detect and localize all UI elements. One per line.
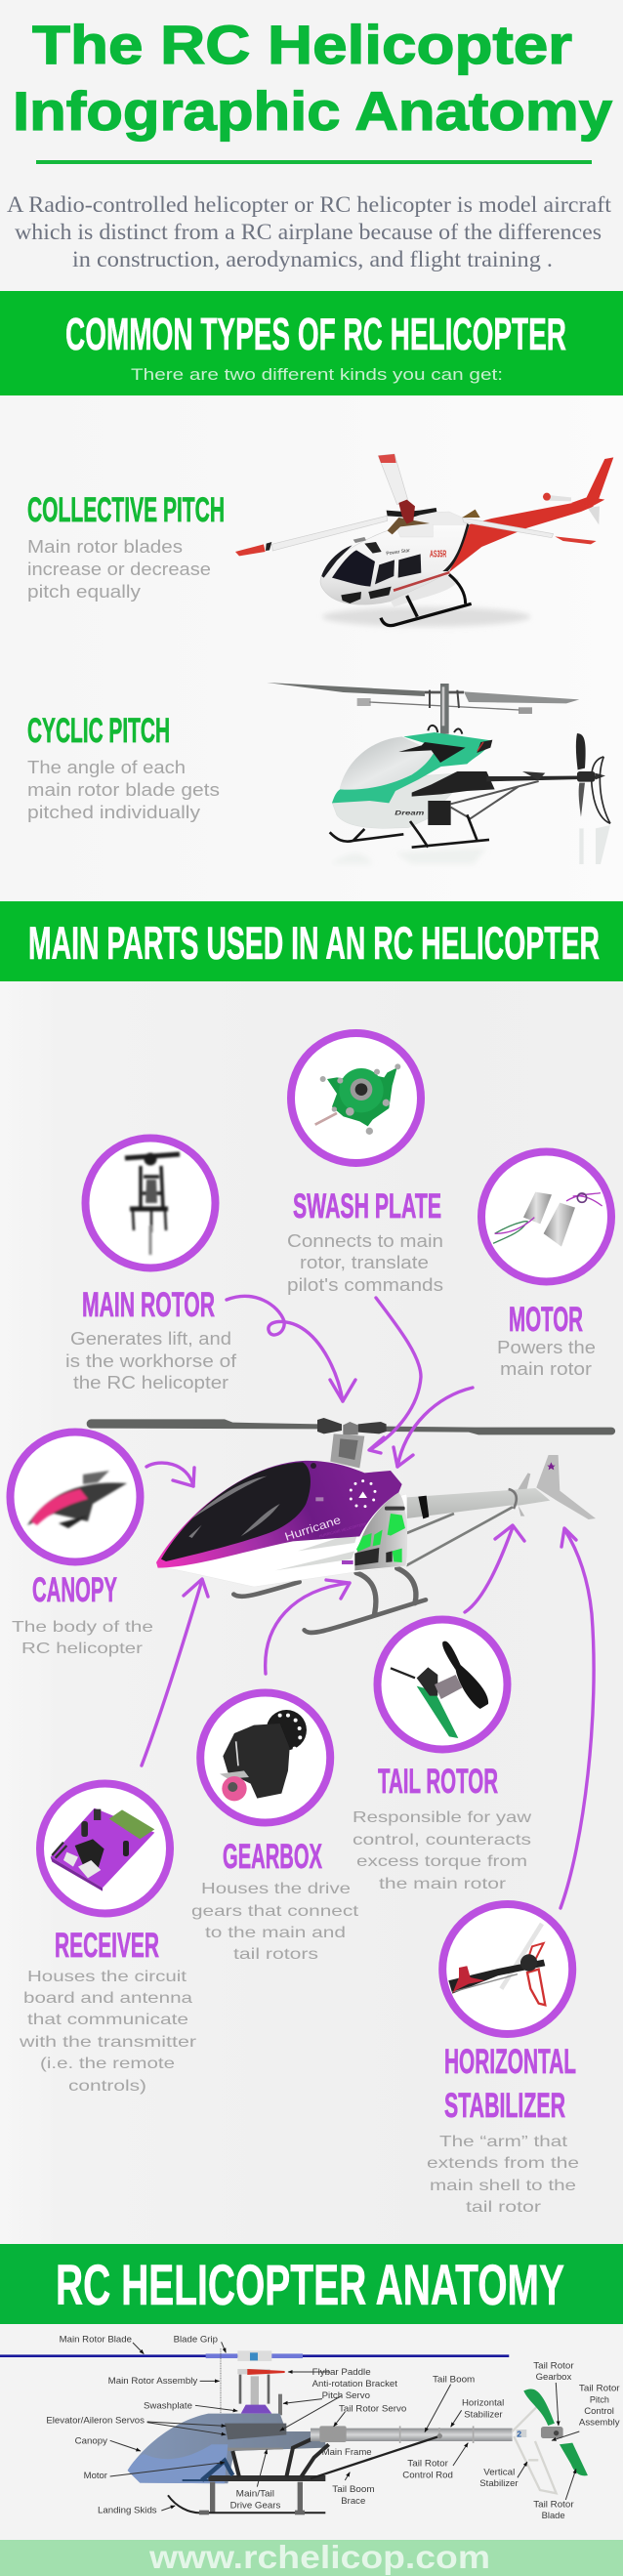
icon: swash plate	[291, 1033, 421, 1163]
text: receiver: board and antenna	[23, 1990, 192, 2007]
text: main rotor: the RC helicopter	[73, 1373, 228, 1392]
arrow: canopy	[146, 1463, 194, 1486]
text: tail rotor: Responsible for yaw	[353, 1809, 532, 1826]
intro paragraph	[7, 192, 612, 271]
text: horizontal stabilizer	[427, 2043, 579, 2216]
part: swash plate	[287, 1033, 443, 1295]
diagram labels: Horizontal	[462, 2397, 504, 2407]
arrow: motor	[394, 1388, 473, 1467]
icon: receiver circuit board	[40, 1783, 170, 1914]
diagram labels: Assembly	[579, 2418, 620, 2428]
text: receiver: controls)	[68, 2078, 146, 2095]
text: tail rotor: control, counteracts	[353, 1832, 531, 1849]
main rotor blade line	[0, 2352, 509, 2360]
text: gearbox: Houses the drive	[201, 1881, 351, 1897]
diagram labels: Main/Tail	[236, 2489, 274, 2499]
text: horizontal stabilizer: extends from the	[427, 2155, 579, 2172]
photo: red white collective pitch helicopter	[235, 454, 613, 627]
anatomy diagram	[0, 2334, 620, 2520]
footer website bar	[0, 2539, 623, 2576]
diagram labels: Gearbox	[536, 2372, 572, 2382]
text: receiver: that communicate	[27, 2012, 188, 2028]
diagram labels: Main Rotor Assembly	[108, 2376, 198, 2386]
title: The RC Helicopter	[32, 14, 572, 75]
text: swash plate: pilot's commands	[287, 1275, 443, 1295]
text: receiver: (i.e. the remote	[40, 2056, 175, 2072]
text: motor	[497, 1301, 596, 1379]
footer website bar: www.rchelicop.com	[148, 2539, 490, 2575]
text block: cyclic pitch: CYCLIC PITCH	[27, 712, 170, 750]
part: receiver	[19, 1783, 197, 2095]
text: swash plate: Connects to main	[287, 1231, 443, 1251]
text: canopy: CANOPY	[32, 1571, 117, 1609]
Hurricane wordmark	[283, 1513, 367, 1544]
diagram labels: Flybar Paddle	[312, 2367, 371, 2377]
banner: common types: There are two different kinds you can get:	[131, 365, 503, 384]
intro paragraph: in construction, aerodynamics, and flight training .	[72, 247, 553, 271]
tail boom	[311, 2389, 588, 2493]
diagram labels: Tail Rotor	[579, 2384, 620, 2393]
diagram labels: Tail Rotor	[533, 2499, 574, 2509]
icon: gearbox	[200, 1693, 330, 1822]
text: gearbox	[191, 1838, 359, 1963]
diagram labels: Canopy	[75, 2435, 107, 2445]
diagram labels: Brace	[341, 2496, 365, 2506]
text block: cyclic pitch	[27, 712, 220, 822]
text: motor: Powers the	[497, 1338, 596, 1357]
canopy purple shell	[156, 1461, 402, 1568]
part: gearbox	[191, 1693, 359, 1963]
text: main rotor: MAIN ROTOR	[82, 1286, 215, 1324]
diagram labels: Pitch	[590, 2394, 609, 2404]
text: gearbox: tail rotors	[233, 1946, 318, 1963]
diagram labels: Blade	[542, 2511, 565, 2520]
diagram labels: Pitch Servo	[322, 2390, 370, 2400]
photo: green cyclic pitch helicopter: Dream	[395, 810, 425, 816]
text: gearbox: gears that connect	[191, 1903, 359, 1920]
diagram labels: Stabilizer	[464, 2409, 503, 2419]
arrow: horizontal stabilizer	[561, 1528, 594, 1908]
text: tail rotor: TAIL ROTOR	[378, 1763, 498, 1801]
icon: motor	[481, 1152, 611, 1281]
text: main rotor: Generates lift, and	[70, 1329, 231, 1349]
rotor head assembly	[221, 2348, 285, 2418]
diagram labels	[46, 2334, 620, 2520]
skids	[233, 1568, 426, 1633]
part: horizontal stabilizer	[427, 1904, 579, 2216]
diagram labels: Main Frame	[322, 2447, 372, 2457]
text: receiver: RECEIVER	[55, 1927, 159, 1965]
text: canopy: The body of the	[12, 1619, 153, 1636]
tail boom: 2	[517, 2429, 521, 2438]
diagram labels: Drive Gears	[230, 2500, 281, 2510]
text block: cyclic pitch: pitched individually	[27, 803, 200, 822]
icon: main rotor head	[86, 1139, 215, 1267]
text: receiver: Houses the circuit	[27, 1969, 187, 1985]
text: tail rotor	[353, 1763, 532, 1892]
leader lines	[110, 2342, 579, 2511]
Hurricane wordmark: Hurricane	[283, 1513, 343, 1544]
text block: collective pitch: pitch equally	[27, 582, 141, 602]
side panel	[342, 1492, 407, 1570]
text: horizontal stabilizer: main shell to the	[430, 2178, 576, 2194]
diagram labels: Tail Rotor Servo	[339, 2403, 406, 2413]
diagram labels: Landing Skids	[98, 2505, 157, 2514]
star emblem	[350, 1479, 376, 1508]
tail boom and fin	[406, 1455, 596, 1565]
text: tail rotor: the main rotor	[379, 1876, 507, 1892]
part: motor	[481, 1152, 611, 1379]
intro paragraph: which is distinct from a RC airplane because of the differences	[15, 220, 602, 244]
text: swash plate: SWASH PLATE	[293, 1187, 441, 1226]
text: canopy: RC helicopter	[21, 1641, 144, 1657]
part: tail rotor	[353, 1619, 532, 1892]
text: receiver: with the transmitter	[19, 2034, 197, 2051]
text: canopy	[12, 1571, 153, 1657]
arrow: gearbox	[266, 1580, 350, 1674]
part: main rotor	[65, 1139, 237, 1392]
diagram labels: Tail Boom	[332, 2484, 375, 2494]
arrow: swash plate	[369, 1298, 421, 1453]
text: tail rotor: excess torque from	[356, 1853, 527, 1870]
icon: canopy	[10, 1432, 141, 1562]
diagram labels: Main Rotor Blade	[60, 2334, 132, 2344]
text: motor: main rotor	[500, 1359, 592, 1379]
icon: horizontal stabilizer	[442, 1904, 572, 2034]
central helicopter illustration	[87, 1418, 615, 1633]
diagram labels: Anti-rotation Bracket	[312, 2379, 397, 2389]
text: receiver	[19, 1927, 197, 2095]
photo: green cyclic pitch helicopter	[267, 683, 610, 864]
text: main rotor: is the workhorse of	[65, 1351, 237, 1371]
diagram labels: Vertical	[483, 2468, 515, 2477]
banner: main parts	[0, 901, 623, 981]
Hurricane wordmark: HURRICANE HELICOPTERS	[318, 1521, 367, 1539]
banner: common types	[0, 291, 623, 395]
text block: collective pitch	[27, 491, 225, 602]
text: gearbox: to the main and	[205, 1925, 346, 1941]
part: canopy	[10, 1432, 153, 1657]
diagram labels: Stabilizer	[479, 2478, 519, 2488]
arrow: main rotor	[227, 1296, 355, 1401]
text: swash plate: rotor, translate	[300, 1253, 429, 1272]
diagram labels: Control	[584, 2406, 614, 2416]
diagram labels: Motor	[84, 2471, 107, 2480]
diagram labels: Elevator/Aileron Servos	[46, 2415, 145, 2425]
diagram labels: Swashplate	[144, 2400, 192, 2410]
text block: collective pitch: Main rotor blades	[27, 537, 183, 557]
arrow: receiver	[142, 1579, 208, 1766]
diagram labels: Tail Boom	[433, 2375, 476, 2385]
text block: cyclic pitch: The angle of each	[27, 758, 186, 777]
text: swash plate	[287, 1187, 443, 1295]
fuselage white hull	[156, 1494, 407, 1587]
text block: cyclic pitch: main rotor blade gets	[27, 780, 220, 800]
diagram labels: Tail Rotor	[407, 2458, 448, 2468]
diagram labels: Tail Rotor	[533, 2360, 574, 2370]
text: horizontal stabilizer: tail rotor	[466, 2199, 542, 2216]
diagram labels: Blade Grip	[174, 2334, 218, 2344]
fuselage	[128, 2414, 325, 2483]
diagram labels: Control Rod	[402, 2470, 453, 2479]
photo: red white collective pitch helicopter: AS35R	[430, 550, 446, 561]
intro paragraph: A Radio-controlled helicopter or RC helicopter is model aircraft	[7, 192, 612, 217]
title: Infographic Anatomy	[13, 80, 612, 142]
text: horizontal stabilizer: The “arm” that	[439, 2134, 568, 2150]
frame and skids	[168, 2438, 329, 2514]
cockpit glass	[161, 1462, 311, 1561]
title	[13, 14, 612, 142]
text: gearbox: GEARBOX	[223, 1838, 322, 1876]
main rotor blades	[87, 1418, 615, 1468]
title divider rule	[36, 160, 592, 164]
icon: tail rotor	[377, 1619, 508, 1750]
text block: collective pitch: increase or decrease	[27, 560, 211, 579]
arrow: tail rotor	[465, 1525, 524, 1612]
text block: collective pitch: COLLECTIVE PITCH	[27, 491, 225, 529]
text: main rotor	[65, 1286, 237, 1392]
photo: red white collective pitch helicopter: Power Star	[386, 548, 411, 557]
